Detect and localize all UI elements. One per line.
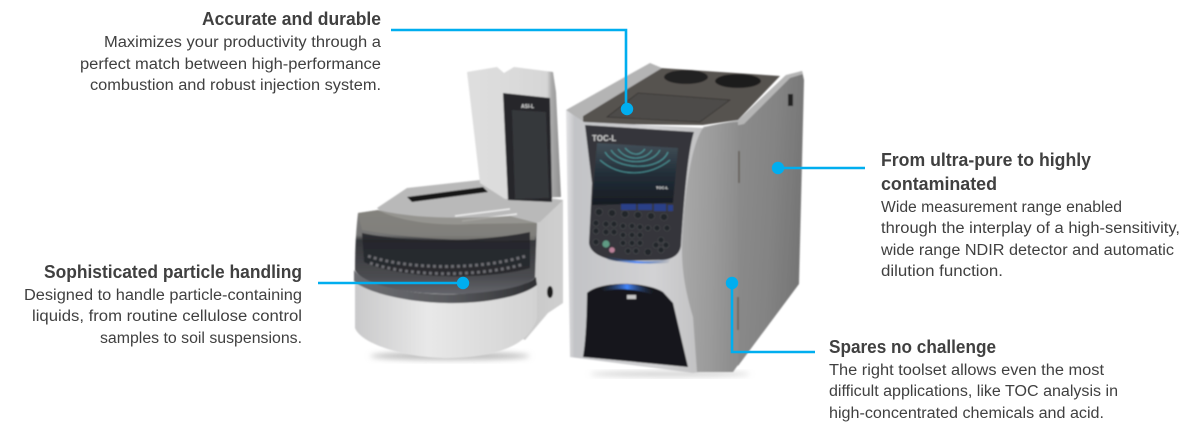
cover arc highlight xyxy=(358,210,537,241)
top flap xyxy=(607,93,730,122)
blue glow lower xyxy=(600,284,654,294)
dot xyxy=(621,103,633,115)
pink stop button xyxy=(609,247,615,253)
callout: Spares no challenge xyxy=(726,277,1118,422)
leader line xyxy=(732,283,815,352)
silver front frame xyxy=(566,110,712,373)
dot xyxy=(726,277,738,289)
window highlight strip xyxy=(512,110,549,199)
sample port left xyxy=(664,70,708,84)
tower dark window xyxy=(503,93,552,202)
tray inner vials xyxy=(362,232,530,276)
keypad xyxy=(593,208,670,256)
green start button xyxy=(602,240,610,248)
body text: high-concentrated chemicals and acid. xyxy=(829,405,1104,422)
side front panel xyxy=(682,122,738,372)
brand label: TOC-L xyxy=(592,134,616,143)
USB port xyxy=(627,295,636,299)
dot xyxy=(457,277,469,289)
heading: From ultra-pure to highly xyxy=(881,150,1091,170)
sample port right xyxy=(715,74,761,88)
side handle xyxy=(788,94,793,106)
silver top-side rim xyxy=(703,71,803,132)
body text xyxy=(880,199,1180,280)
screen swirl graphic xyxy=(600,148,670,173)
heading: Accurate and durable xyxy=(202,9,381,29)
tower label: ASI-L xyxy=(521,104,534,110)
body text: The right toolset allows even the most xyxy=(829,362,1105,379)
heading xyxy=(881,150,1091,194)
lower black door xyxy=(583,284,688,367)
autosampler rear body xyxy=(400,190,563,340)
blue glow upper xyxy=(603,255,672,264)
callout: Accurate and durable xyxy=(80,9,633,115)
vial rows xyxy=(368,256,526,274)
callout: Sophisticated particle handling xyxy=(24,262,469,347)
tray rim xyxy=(354,270,537,303)
autosampler tower xyxy=(467,67,561,199)
body text xyxy=(829,362,1118,422)
leader line xyxy=(778,167,865,169)
body text: liquids, from routine cellulose control xyxy=(32,308,302,325)
body text: difficult applications, like TOC analysis in xyxy=(829,383,1118,400)
body text: wide range NDIR detector and automatic xyxy=(880,242,1174,259)
screen product label: TOC-L xyxy=(656,185,669,190)
body text: Maximizes your productivity through a xyxy=(104,34,381,51)
heading: Spares no challenge xyxy=(829,337,996,357)
body text xyxy=(80,34,381,94)
touch screen xyxy=(592,143,678,211)
dark top surface xyxy=(583,68,780,125)
side connector xyxy=(547,286,553,298)
panel: TOC-L main instrument xyxy=(566,63,804,376)
base drum xyxy=(355,278,537,358)
dot xyxy=(772,162,784,174)
callout: From ultra-pure to highly contaminated xyxy=(772,150,1180,280)
screen softkeys xyxy=(621,204,673,211)
leader line xyxy=(391,30,626,108)
heading: contaminated xyxy=(881,174,997,194)
instrument side panel xyxy=(738,71,804,366)
leader line xyxy=(318,282,463,284)
body text: through the interplay of a high-sensitivity, xyxy=(881,220,1180,237)
sample tray cover xyxy=(355,210,537,294)
side vents xyxy=(738,151,739,330)
body text: dilution function. xyxy=(881,263,1003,280)
panel: autosampler ASI-L xyxy=(354,67,563,360)
deck vents xyxy=(455,209,517,221)
body text: Wide measurement range enabled xyxy=(881,199,1122,216)
left top rail xyxy=(566,63,662,124)
heading: Sophisticated particle handling xyxy=(44,262,302,282)
autosampler top deck xyxy=(377,180,563,232)
body text: Designed to handle particle-containing xyxy=(24,287,302,304)
dark control fascia xyxy=(585,125,694,261)
body text xyxy=(24,287,302,347)
deck slot xyxy=(407,187,488,202)
body text: combustion and robust injection system. xyxy=(90,77,381,94)
body text: samples to soil suspensions. xyxy=(100,330,302,347)
body text: perfect match between high-performance xyxy=(80,56,381,73)
